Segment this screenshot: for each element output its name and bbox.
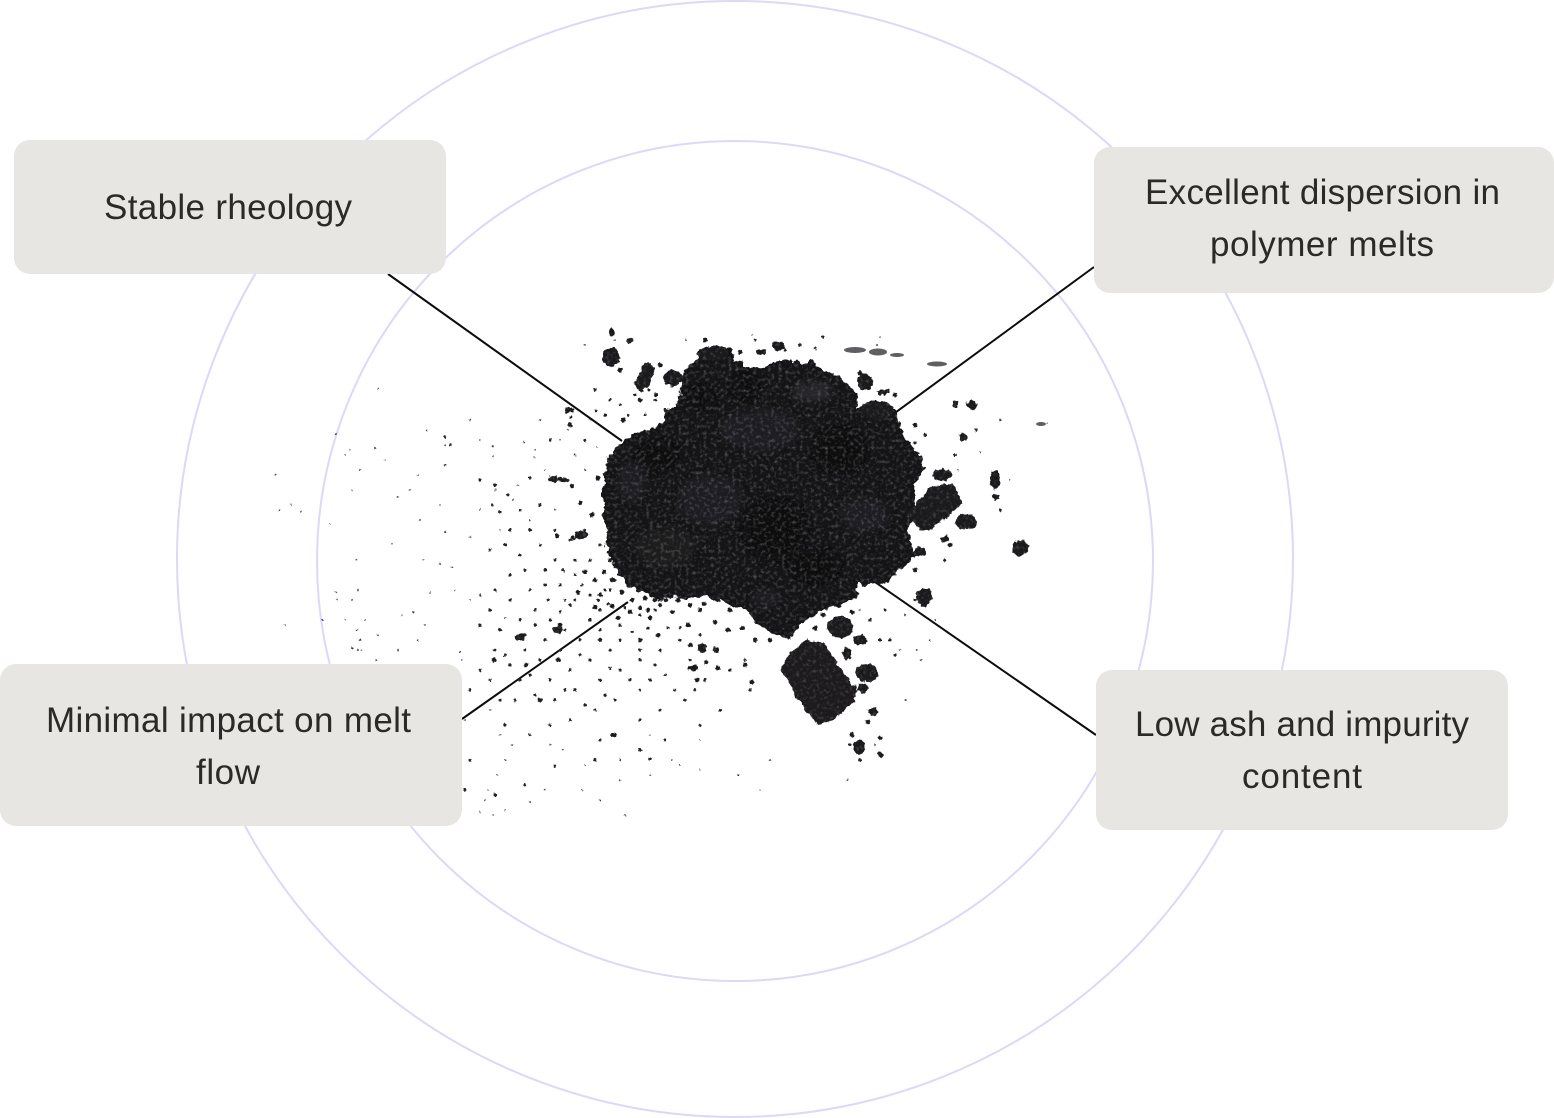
gray dust flecks <box>844 347 1046 426</box>
scattered fine particles <box>275 335 1047 815</box>
inner ring <box>317 141 1153 981</box>
detached clumps <box>515 328 1028 758</box>
callout: Minimal impact on melt flow: Minimal impact on melt <box>46 701 411 740</box>
connector lines <box>388 267 1096 735</box>
callout: Excellent dispersion in polymer melts: Excellent dispersion in <box>1145 173 1500 212</box>
callout: Excellent dispersion in polymer melts: polymer melts <box>1210 225 1434 264</box>
callout: Excellent dispersion in polymer melts <box>1094 147 1554 293</box>
callout: Low ash and impurity content <box>1096 670 1508 830</box>
mound surface texture <box>618 374 889 608</box>
image: carbon black powder pile <box>275 328 1047 815</box>
callout: Stable rheology <box>14 140 446 274</box>
callout: Low ash and impurity content: content <box>1242 757 1362 796</box>
main powder mound <box>603 348 925 640</box>
callout: Low ash and impurity content: Low ash and impurity <box>1135 705 1470 744</box>
callout: Minimal impact on melt flow: flow <box>196 753 261 792</box>
outer ring <box>177 1 1293 1117</box>
callout: Stable rheology: Stable rheology <box>104 188 352 227</box>
callout: Minimal impact on melt flow <box>0 664 462 826</box>
